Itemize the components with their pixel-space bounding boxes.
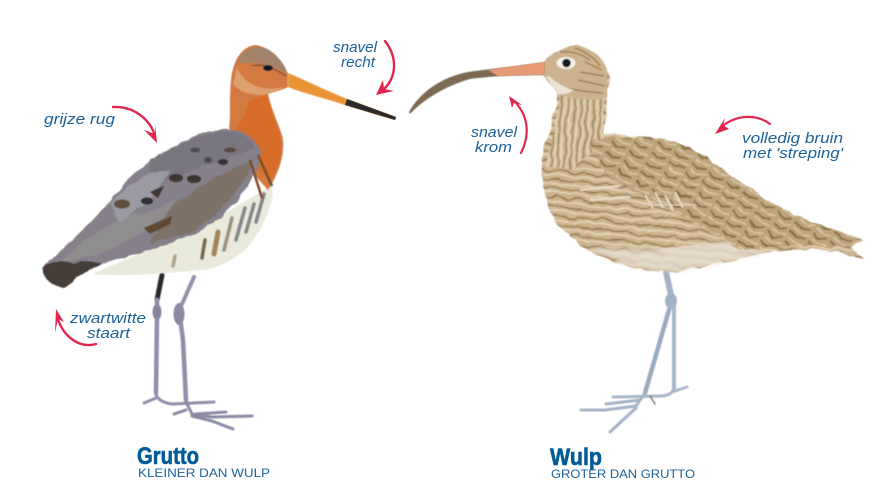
Grutto legs	[144, 275, 252, 429]
Grutto back markings	[114, 148, 272, 234]
Wulp wing highlights	[580, 186, 700, 250]
arrow: zwartwitte staart	[55, 309, 96, 345]
Grutto neck and head	[229, 45, 288, 190]
title: Grutto: Grutto	[137, 443, 199, 470]
Wulp beak	[409, 62, 545, 114]
text: snavel recht: snavel	[333, 39, 378, 56]
arrow: grijze rug	[113, 107, 157, 143]
bird: Grutto	[42, 45, 396, 429]
subtitle: kleiner dan wulp: KLEINER DAN WULP	[138, 466, 270, 480]
label: snavel krom	[471, 96, 527, 156]
Wulp legs	[581, 272, 687, 432]
text: zwartwitte staart: staart	[87, 325, 131, 342]
title: Wulp: Wulp	[550, 444, 602, 471]
Grutto beak	[288, 73, 396, 120]
text: snavel krom: snavel	[471, 124, 518, 141]
Wulp belly wash	[590, 240, 767, 271]
arrow: snavel krom	[509, 96, 527, 153]
Grutto belly	[92, 185, 273, 275]
label: snavel recht	[333, 39, 394, 95]
text: zwartwitte staart: zwartwitte	[69, 310, 146, 327]
text: snavel recht: recht	[341, 54, 376, 71]
Grutto flank stripes	[173, 194, 264, 266]
Grutto wing and back	[42, 129, 262, 286]
subtitle: groter dan grutto: GROTER DAN GRUTTO	[551, 467, 695, 481]
arrow: snavel recht	[376, 41, 394, 95]
label: volledig bruin met streping	[715, 117, 844, 162]
label: zwartwitte staart	[55, 309, 146, 345]
bird: Wulp	[409, 45, 865, 432]
caption: Grutto	[137, 443, 270, 480]
label: grijze rug	[44, 107, 157, 143]
Wulp head	[543, 45, 607, 100]
Wulp neck	[545, 95, 604, 170]
Wulp body	[542, 45, 865, 272]
arrow: volledig bruin	[715, 117, 770, 134]
text: volledig bruin met streping: met 'streping'	[743, 145, 844, 162]
text: grijze rug: grijze rug	[44, 111, 116, 128]
Wulp wing	[590, 137, 860, 250]
text: snavel krom: krom	[475, 139, 512, 156]
text: volledig bruin met streping: volledig bruin	[742, 130, 843, 147]
caption: Wulp	[550, 444, 695, 481]
